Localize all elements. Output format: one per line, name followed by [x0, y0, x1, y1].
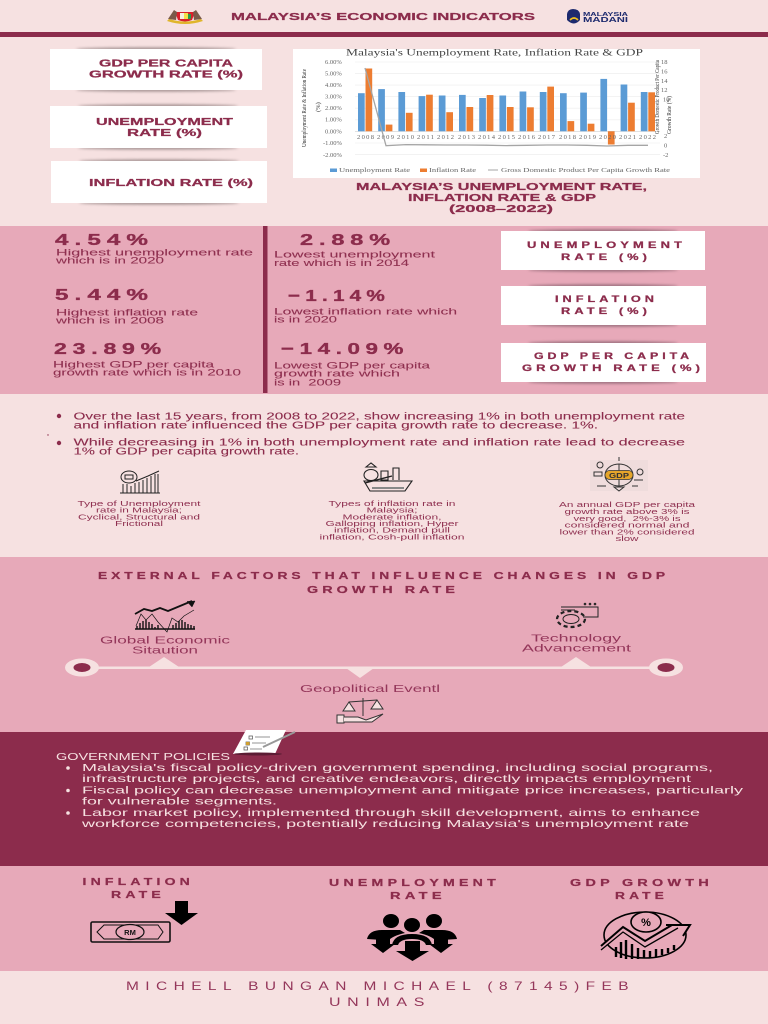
- title: MALAYSIA’S ECONOMIC INDICATORS: [231, 11, 535, 23]
- caption: rate in Malaysia;: [96, 508, 182, 515]
- icon: scales in hand: [337, 698, 383, 723]
- caption: [559, 502, 695, 543]
- stat: highest GDP: growth rate which is in 2010: [53, 368, 241, 378]
- factor: global economic situation: [100, 601, 230, 656]
- stat: highest inflation: 5.44%: [55, 287, 154, 304]
- left axis title: (%): [315, 102, 322, 112]
- icon: growth with percent: %: [641, 917, 651, 929]
- policy: fiscal spending: Malaysia's fiscal policy-driven government spending, including social programs,: [82, 762, 713, 774]
- panel: indicator cards: [50, 47, 267, 205]
- year labels: 2010: [397, 134, 414, 141]
- year labels: 2019: [579, 134, 596, 141]
- stat: highest unemployment: Highest unemployment rate: [56, 248, 253, 258]
- left axis labels: 4.00%: [325, 82, 342, 89]
- caption: [78, 501, 201, 528]
- outcome: inflation rate: [82, 877, 198, 942]
- left axis labels: 5.00%: [325, 70, 342, 78]
- caption: Types of inflation rate in: [328, 501, 456, 508]
- inflation bars: [366, 68, 655, 144]
- chart title: Malaysia's Unemployment Rate, Inflation Rate & GDP: [346, 48, 643, 58]
- left axis labels: 2.00%: [325, 105, 342, 112]
- caption: inflation, Demand pull: [334, 528, 451, 535]
- card: unemployment rate: RATE (%): [561, 252, 651, 263]
- chart: unemployment, inflation and GDP: [293, 48, 700, 178]
- year labels: 2012: [437, 134, 454, 141]
- icon: inflation basket: [364, 463, 412, 491]
- card: unemployment rate: UNEMPLOYMENT: [96, 117, 234, 128]
- stat: highest GDP: 23.89%: [54, 341, 167, 358]
- label: [522, 632, 631, 654]
- label: [100, 634, 230, 656]
- right axis title: Growth Domestic Product Per Capita: [654, 60, 661, 134]
- card: unemployment rate: UNEMPLOYMENT: [527, 240, 686, 251]
- chart legend: [330, 167, 670, 174]
- card: GDP per capita growth rate: GDP PER CAPITA: [99, 58, 234, 70]
- policy: fiscal spending: [66, 762, 713, 785]
- stat: lowest GDP: is in 2009: [274, 378, 341, 388]
- year labels: 2022: [639, 134, 656, 141]
- label: Technology: [531, 632, 622, 644]
- icon: Malaysia coat of arms: [167, 10, 203, 24]
- stat: lowest inflation: −1.14%: [288, 288, 390, 305]
- stat: lowest unemployment: Lowest unemployment: [274, 250, 436, 260]
- stat: lowest unemployment: rate which is in 2014: [274, 258, 409, 269]
- year labels: 2015: [498, 134, 515, 141]
- heading: [98, 570, 669, 596]
- left axis labels: 0.00%: [325, 128, 342, 136]
- stat: highest unemployment: [54, 232, 253, 266]
- icon: Malaysia Madani logo: MADANI: [583, 17, 628, 24]
- chart legend: Unemployment Rate: [339, 167, 410, 174]
- year labels: 2014: [478, 134, 496, 141]
- card: inflation rate: RATE (%): [561, 306, 651, 317]
- card: unemployment rate: [501, 231, 705, 270]
- stat: highest GDP: Highest GDP per capita: [53, 360, 215, 370]
- outcome: inflation rate: RATE: [111, 890, 165, 901]
- caption: [320, 501, 465, 541]
- heading: EXTERNAL FACTORS THAT INFLUENCE CHANGES IN GDP: [98, 570, 669, 582]
- caption: considered normal and: [564, 523, 690, 530]
- right axis labels: 0: [664, 142, 667, 150]
- outcome: GDP growth rate: [570, 878, 713, 959]
- year labels: 2016: [518, 134, 536, 141]
- stat: lowest unemployment: 2.88%: [300, 232, 396, 249]
- icon: growth with percent: [601, 912, 690, 959]
- policy: labor market: Labor market policy, implemented through skill development, aims to enhance: [82, 807, 700, 819]
- stat: lowest inflation: [274, 288, 457, 326]
- stat: lowest GDP: [274, 341, 431, 388]
- timeline: [65, 657, 683, 678]
- column: types of unemployment: [78, 471, 201, 528]
- panel: government policies: [0, 730, 768, 866]
- caption: lower than 2% considered: [560, 529, 695, 536]
- year labels: 2011: [417, 134, 434, 141]
- right axis labels: 16: [661, 68, 668, 76]
- icon: gear and window: [557, 603, 598, 627]
- column: types of inflation: [320, 463, 465, 541]
- policy: labor market: workforce competencies, potentially reducing Malaysia's unemployment rate: [80, 818, 689, 830]
- right axis labels: 10: [663, 96, 670, 104]
- label: Global Economic: [100, 634, 230, 646]
- text block: key findings: Over the last 15 years, from 2008 to 2022, show increasing 1% in both unemployment rate: [74, 412, 686, 422]
- policy: fiscal relief: Fiscal policy can decrease unemployment and mitigate price increases, particularly: [82, 784, 744, 796]
- policy: fiscal spending: infrastructure projects, and creative endeavors, directly impacts employment: [82, 773, 691, 785]
- caption: very good, 2%-3% is: [574, 516, 681, 523]
- card: unemployment rate: [50, 106, 267, 148]
- stat: lowest GDP: growth rate which: [274, 368, 400, 380]
- year labels: 2009: [377, 134, 394, 141]
- stat: lowest inflation: is in 2020: [274, 314, 337, 326]
- text block: key findings: and inflation rate influenced the GDP per capita growth rate to decrease. 1%.: [74, 420, 598, 432]
- stat: lowest GDP: Lowest GDP per capita: [274, 360, 431, 372]
- left axis labels: -2.00%: [323, 152, 343, 159]
- caption: Type of Unemployment: [78, 501, 201, 508]
- right axis labels: 14: [661, 78, 668, 85]
- outcome: unemployment rate: [329, 878, 500, 961]
- icon: unemployment chart: [120, 471, 160, 493]
- card: inflation rate: [51, 161, 267, 203]
- icon: Malaysia Madani logo: MALAYSIA: [583, 12, 628, 18]
- stat: lowest inflation: Lowest inflation rate which: [274, 306, 457, 318]
- chart caption: (2008–2022): [449, 204, 553, 215]
- card: GDP per capita growth rate: GROWTH RATE (%): [89, 70, 243, 80]
- year labels: 2008: [357, 134, 374, 141]
- caption: Moderate inflation,: [342, 514, 442, 521]
- stat: highest inflation: [54, 287, 198, 326]
- chart caption: MALAYSIA’S UNEMPLOYMENT RATE,: [356, 182, 647, 193]
- left axis labels: 1.00%: [325, 116, 342, 124]
- card: inflation rate: INFLATION RATE (%): [89, 178, 253, 189]
- stat: highest inflation: Highest inflation rate: [56, 308, 198, 318]
- left axis labels: 6.00%: [325, 59, 342, 66]
- stat: highest unemployment: which is in 2020: [54, 256, 164, 266]
- right axis title: Growth Rate (%): [666, 96, 673, 134]
- card: inflation rate: INFLATION: [555, 294, 658, 305]
- card: GDP per capita growth rate: GDP PER CAPITA: [534, 351, 693, 362]
- footer credit: UNIMAS: [329, 995, 431, 1009]
- factor: technology advancement: [522, 603, 631, 654]
- year labels: 2018: [559, 134, 576, 141]
- label: Geopolitical Eventl: [300, 683, 440, 695]
- text block: key findings: While decreasing in 1% in both unemployment rate and inflation rate lead to decrease: [74, 438, 686, 448]
- icon: checklist and pen: [233, 730, 295, 756]
- stat: lowest GDP: −14.09%: [281, 341, 409, 358]
- right axis labels: 2: [664, 133, 667, 140]
- outcome: GDP growth rate: RATE: [615, 891, 668, 902]
- outcome: inflation rate: INFLATION: [82, 877, 194, 888]
- left axis labels: [323, 59, 343, 159]
- caption: Frictional: [115, 521, 164, 528]
- panel: external factors: [0, 557, 768, 732]
- left axis labels: -1.00%: [323, 140, 343, 147]
- unemployment bars: [358, 79, 648, 131]
- chart caption: INFLATION RATE & GDP: [408, 193, 596, 204]
- heading: GOVERNMENT POLICIES: [56, 751, 230, 763]
- caption: Galloping inflation, Hyper: [326, 521, 460, 528]
- policy: fiscal relief: [66, 784, 744, 808]
- label: Sitaution: [132, 644, 198, 656]
- factor: geopolitical event: [300, 683, 440, 723]
- label: Advancement: [522, 642, 631, 654]
- year labels: 2017: [538, 134, 556, 141]
- right axis labels: [661, 59, 670, 159]
- icon: banknote with down arrow: RM: [124, 928, 136, 937]
- card: inflation rate: [501, 286, 706, 325]
- policy: labor market: [66, 807, 700, 830]
- panel: policy outcomes: [0, 866, 768, 971]
- left axis labels: 3.00%: [325, 94, 342, 100]
- outcome: GDP growth rate: GDP GROWTH: [570, 878, 713, 889]
- text block: key findings: 1% of GDP per capita growth rate.: [74, 446, 299, 458]
- policy: fiscal relief: for vulnerable segments.: [82, 796, 277, 808]
- footer credit: [126, 979, 635, 1009]
- heading: GROWTH RATE: [307, 584, 459, 596]
- GDP growth line: [365, 68, 648, 146]
- left axis title: Unemployment Rate & Inflation Rate: [301, 69, 308, 147]
- caption: growth rate above 3% is: [564, 509, 690, 516]
- left axis title: [301, 69, 322, 147]
- icon: market chart: [135, 601, 195, 632]
- icon: Malaysia Madani logo: [567, 9, 628, 24]
- stat: highest unemployment: 4.54%: [55, 232, 154, 249]
- year labels: 2020: [599, 134, 616, 141]
- right axis title: [654, 60, 673, 134]
- icon: people with down arrows: [367, 914, 457, 961]
- chart legend: Gross Domestic Product Per Capita Growth Rate: [501, 167, 670, 174]
- year labels: 2021: [619, 134, 636, 141]
- caption: inflation, Cosh-pull inflation: [320, 534, 465, 541]
- right axis labels: -2: [663, 152, 668, 159]
- caption: Cyclical, Structural and: [78, 514, 200, 521]
- caption: Malaysia;: [366, 508, 418, 515]
- stat: highest inflation: which is in 2008: [54, 316, 164, 326]
- card: unemployment rate: RATE (%): [127, 128, 202, 139]
- right axis labels: 18: [661, 59, 668, 66]
- outcome: unemployment rate: RATE: [390, 891, 446, 902]
- text block: key findings: [47, 412, 686, 458]
- footer credit: MICHELL BUNGAN MICHAEL (87145)FEB: [126, 979, 635, 993]
- outcome: unemployment rate: UNEMPLOYMENT: [329, 878, 500, 889]
- icon: GDP globe: GDP: [609, 473, 629, 480]
- column: GDP guide: [559, 457, 695, 543]
- chart caption: [356, 182, 647, 215]
- caption: slow: [616, 536, 640, 543]
- chart legend: Inflation Rate: [429, 167, 476, 174]
- year labels: [357, 134, 656, 141]
- right axis labels: 12: [661, 87, 668, 94]
- card: GDP per capita growth rate: [501, 343, 706, 382]
- stat: highest GDP: [53, 341, 241, 378]
- caption: An annual GDP per capita: [559, 502, 695, 509]
- stat: lowest unemployment: [274, 232, 436, 269]
- panel: highest and lowest statistics: [0, 226, 768, 394]
- card: GDP per capita growth rate: [50, 49, 262, 90]
- header: [0, 9, 768, 37]
- header rule: [0, 32, 768, 37]
- card: GDP per capita growth rate: GROWTH RATE (%): [522, 363, 704, 374]
- year labels: 2013: [458, 134, 475, 141]
